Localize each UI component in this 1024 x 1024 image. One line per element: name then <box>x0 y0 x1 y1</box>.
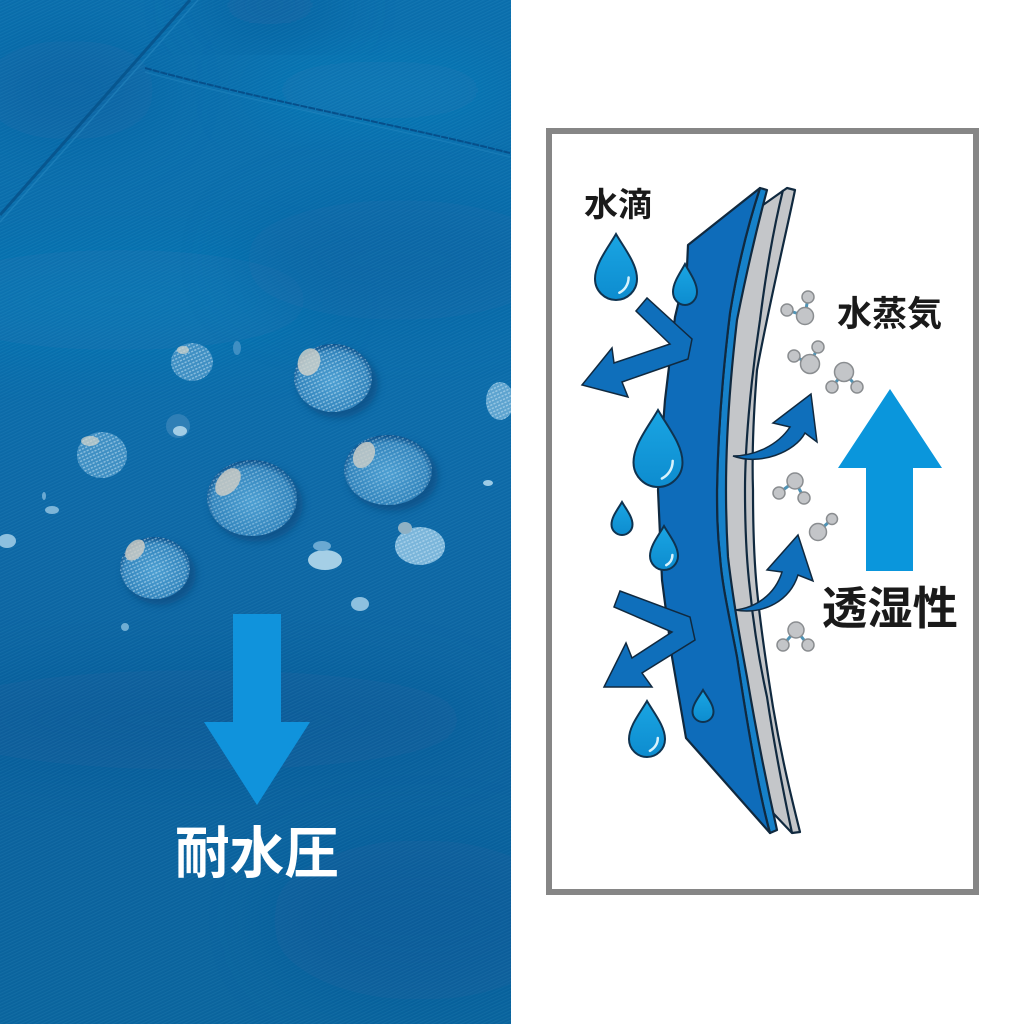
garment seams <box>0 0 510 222</box>
dark blue main layer <box>658 188 770 833</box>
label: breathability: 透湿性 <box>822 583 958 634</box>
icon: vapor molecule 6 <box>777 622 814 651</box>
icon: vapor molecule 5 <box>810 514 838 540</box>
panel: membrane diagram frame <box>549 131 976 892</box>
arrow: upper water deflection <box>582 298 692 397</box>
light blue layer <box>717 188 777 833</box>
label: water drops: 水滴 <box>584 186 652 223</box>
icon: vapor molecule 4 <box>773 473 810 504</box>
icon: water drop 3 <box>634 410 682 487</box>
icon: vapor molecule 2 <box>788 341 824 374</box>
arrow: upper vapor passage <box>733 394 817 459</box>
inner membrane line <box>745 190 792 833</box>
water droplets <box>0 341 514 631</box>
arrow: lower water deflection <box>604 591 695 687</box>
panel: fabric photo with water beads <box>0 0 511 1024</box>
icon: water drop 5 <box>650 526 678 570</box>
grey breathable layer <box>720 188 800 833</box>
arrow: lower vapor passage <box>735 535 813 611</box>
icon: water drop 7 <box>629 701 665 757</box>
label: water resistance: 耐水圧 <box>175 822 339 885</box>
icon: water drop 2 <box>673 264 697 305</box>
icon: vapor molecule 3 <box>826 362 863 393</box>
label: water vapor: 水蒸気 <box>837 295 942 334</box>
arrow: downward water pressure <box>204 614 310 805</box>
icon: water drop 6 <box>692 690 714 722</box>
icon: vapor molecule 1 <box>781 291 814 324</box>
icon: water drop 1 <box>595 234 637 300</box>
membrane layers <box>658 188 800 833</box>
arrow: upward breathability <box>838 389 942 571</box>
icon: water drop 4 <box>612 502 632 535</box>
